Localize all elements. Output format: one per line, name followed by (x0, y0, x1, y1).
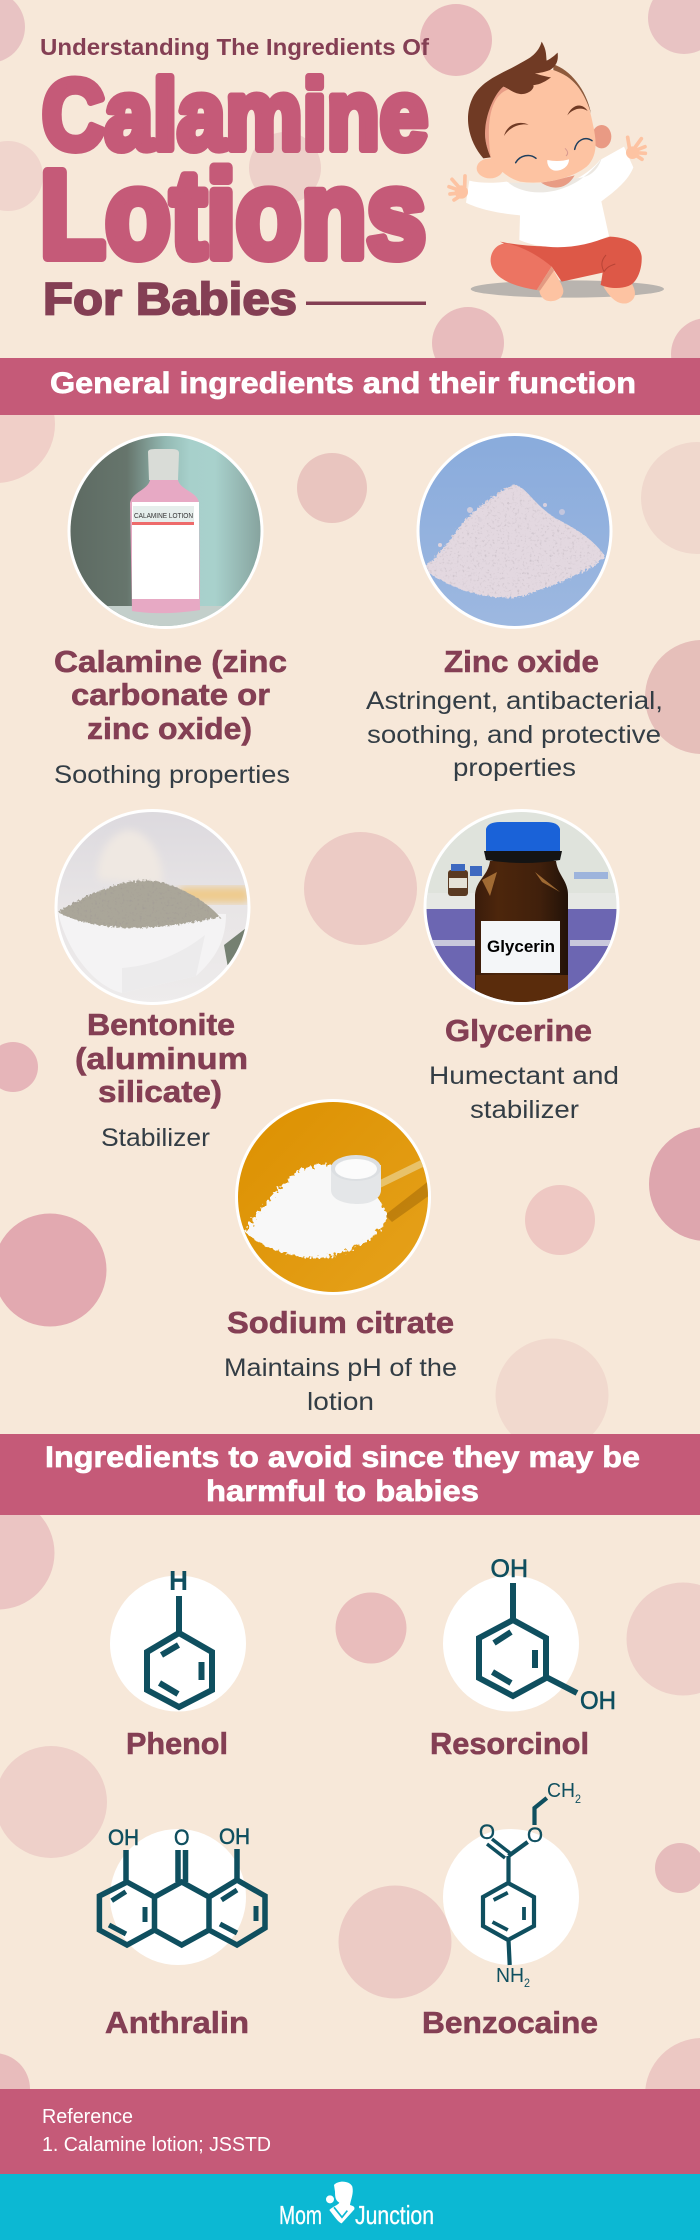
heading: Bentonite (87, 1007, 235, 1042)
banner heading: Ingredients to avoid since they may be (45, 1441, 640, 1474)
name: Benzocaine (422, 2005, 598, 2040)
photo: zinc oxide powder (416, 433, 613, 629)
ingredient: zinc oxide: properties (453, 754, 576, 782)
heading: Sodium citrate (227, 1305, 454, 1340)
heading: Calamine (zinc (54, 644, 287, 679)
ingredient: glycerine (423, 809, 625, 1124)
ingredient: zinc oxide: soothing, and protective (367, 721, 661, 749)
chemical structure: benzocaine: 2 (524, 1976, 530, 1990)
chemical structure: anthralin: OH (108, 1825, 139, 1850)
photo: sodium citrate powder with scoop (235, 1099, 433, 1297)
ingredient: calamine: carbonate or (71, 677, 270, 712)
footer band with MomJunction logo (0, 2174, 700, 2240)
chemical structure: resorcinol: OH (580, 1687, 616, 1715)
reference band (0, 2089, 700, 2174)
logo wordmark right: Junction (355, 2200, 434, 2230)
chemical structure: benzocaine: 2 (575, 1792, 581, 1806)
photo: calamine lotion bottle: CALAMINE LOTION (134, 511, 193, 520)
ingredient: calamine: zinc oxide) (87, 711, 252, 746)
chemical structure: phenol: H (169, 1565, 188, 1596)
harmful ingredient: resorcinol (430, 1555, 616, 1761)
chemical structure: benzocaine: NH (496, 1965, 524, 1987)
banner heading: General ingredients and their function (50, 367, 636, 400)
ingredient: zinc oxide (366, 433, 663, 782)
photo: glycerin bottle (423, 809, 625, 1007)
icon: smiling baby sitting (449, 42, 664, 304)
reference entry: 1. Calamine lotion; JSSTD (42, 2134, 271, 2156)
harmful ingredient: anthralin (99, 1824, 265, 2040)
chemical structure: anthralin: O (174, 1825, 190, 1850)
ingredient: bentonite (54, 809, 252, 1152)
section banner: general ingredients (0, 358, 700, 415)
heading: Glycerine (445, 1013, 592, 1048)
name: Resorcinol (430, 1726, 589, 1761)
chemical structure: anthralin (99, 1824, 265, 1945)
ingredient: glycerine: stabilizer (470, 1096, 579, 1124)
chemical structure: benzocaine: O (527, 1824, 543, 1847)
title underline rule (306, 302, 426, 305)
description: Stabilizer (101, 1124, 210, 1152)
header title block (40, 34, 429, 324)
description: Maintains pH of the (224, 1354, 457, 1382)
section banner: ingredients to avoid (0, 1434, 700, 1515)
title: For Babies: For Babies (43, 274, 297, 324)
title: kicker line: Understanding The Ingredients Of (40, 34, 429, 60)
white disc (443, 1576, 579, 1712)
description: Soothing properties (54, 761, 290, 789)
logo wordmark left: Mom (279, 2200, 322, 2230)
description: Astringent, antibacterial, (366, 687, 663, 715)
heading: Zinc oxide (444, 644, 599, 679)
photo: glycerin bottle: Glycerin (487, 937, 555, 956)
reference label: Reference (42, 2106, 133, 2128)
name: Phenol (126, 1726, 228, 1761)
white disc (110, 1829, 246, 1965)
chemical structure: phenol (147, 1565, 212, 1707)
chemical structure: benzocaine: CH (547, 1780, 575, 1802)
description: Humectant and (429, 1062, 619, 1090)
ingredient: calamine (54, 433, 290, 789)
harmful ingredient: phenol (110, 1565, 246, 1761)
section banner: ingredients to avoid: harmful to babies (206, 1475, 479, 1508)
photo: bentonite clay in white bowl (54, 809, 252, 1007)
logo: mother and child figure (326, 2182, 354, 2223)
chemical structure: resorcinol: OH (490, 1555, 528, 1583)
white disc (110, 1576, 246, 1712)
ingredient: bentonite: (aluminum (75, 1041, 248, 1076)
harmful ingredient: benzocaine (422, 1780, 598, 2040)
ingredient: bentonite: silicate) (98, 1074, 222, 1109)
name: Anthralin (105, 2005, 249, 2040)
chemical structure: benzocaine: O (479, 1821, 495, 1844)
chemical structure: resorcinol (479, 1555, 616, 1715)
photo: calamine lotion bottle (68, 433, 264, 630)
chemical structure: anthralin: OH (219, 1824, 250, 1849)
ingredient: sodium citrate: lotion (307, 1388, 374, 1416)
title: Lotions: Lotions (40, 147, 426, 284)
ingredient: sodium citrate (224, 1099, 457, 1416)
chemical structure: benzocaine (479, 1780, 581, 1990)
white disc (443, 1829, 579, 1965)
title: Calamine: Calamine (42, 59, 428, 170)
